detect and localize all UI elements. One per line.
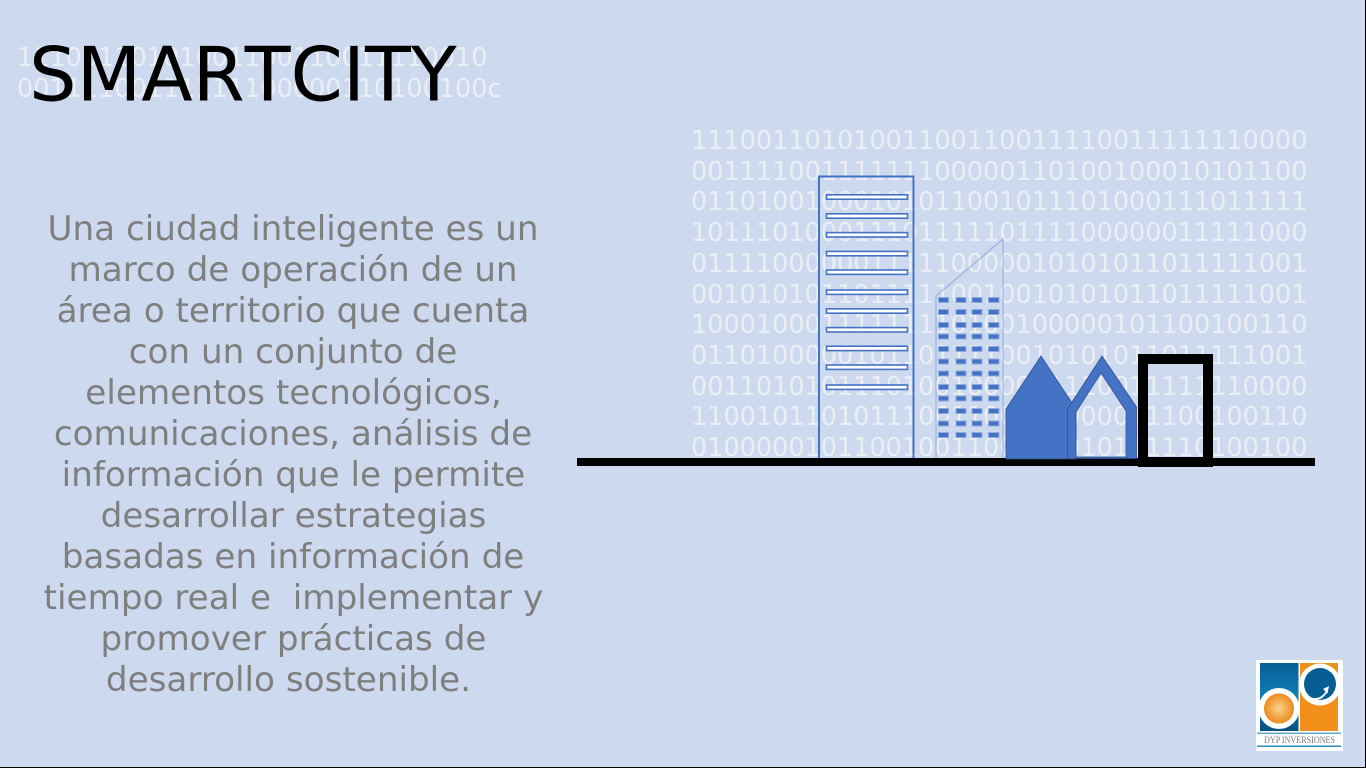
title: SMARTCITY (29, 30, 457, 118)
binary code backdrop: 00101010110111110010010101011011111001 (691, 280, 1308, 310)
description text block: marco de operación de un (68, 250, 518, 290)
solid house (1006, 356, 1076, 459)
binary code backdrop: 00110101011101001000011110011111110000 (691, 372, 1308, 402)
title binary backdrop: 11100110101001100110011110010 (17, 43, 488, 73)
title binary backdrop (17, 43, 502, 104)
description text block: promover prácticas de (101, 619, 486, 659)
binary code backdrop: 00111100111111100000110100100010101100 (691, 157, 1308, 187)
binary code backdrop: 01101001000101011001011101000111011111 (691, 187, 1308, 217)
outlined house (1068, 356, 1136, 458)
description text block: área o territorio que cuenta (57, 291, 529, 331)
description text block: información que le permite (62, 455, 525, 495)
title binary backdrop: 00111100111111100000110100100c (17, 74, 502, 104)
description text block: con un conjunto de (129, 332, 457, 372)
description text block: elementos tecnológicos, (85, 373, 502, 413)
logo: DYP Inversiones (1256, 660, 1343, 751)
binary code backdrop: 11001011010111001100111000011100100110 (691, 402, 1308, 432)
description text block: desarrollo sostenible. (106, 660, 471, 700)
description text block: tiempo real e implementar y (44, 578, 543, 618)
ground line (577, 458, 1315, 466)
binary code backdrop: 11100110101001100110011110011111110000 (691, 126, 1308, 156)
binary code backdrop: 01000001011001001100110010111110100100 (691, 433, 1308, 463)
city illustration (577, 176, 1315, 466)
binary code backdrop: 01111000000111110000010101011011111001 (691, 249, 1308, 279)
description text block: comunicaciones, análisis de (54, 414, 532, 454)
description text block: desarrollar estrategias (101, 496, 486, 536)
black square outline (1143, 359, 1208, 462)
description text block: Una ciudad inteligente es un (47, 209, 539, 249)
binary code backdrop: 01101000001011011110010101011011111001 (691, 341, 1308, 371)
tall office tower (819, 176, 914, 460)
binary code backdrop (691, 126, 1308, 463)
description text block: basadas en información de (62, 537, 524, 577)
binary code backdrop: 10111010001110111110111100000011111000 (691, 218, 1308, 248)
slanted glass building (936, 239, 1003, 460)
description text block (44, 209, 543, 700)
logo: DYP Inversiones: DYP INVERSIONES (1264, 736, 1335, 746)
binary code backdrop: 10001000111111110100100000101100100110 (691, 310, 1308, 340)
